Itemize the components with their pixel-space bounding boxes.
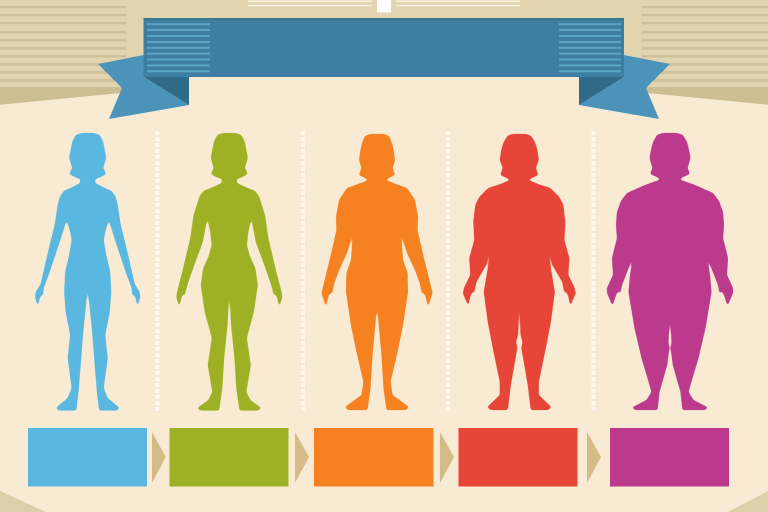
figure: purple severely obese body — [607, 133, 733, 410]
legend box: purple — [610, 428, 729, 486]
arrow 2 — [295, 432, 309, 483]
bottom right corner wedge — [728, 491, 768, 512]
banner ribbon — [98, 18, 670, 119]
figure: orange overweight body — [322, 134, 432, 410]
arrow 1 — [152, 432, 166, 483]
bottom left corner wedge — [0, 491, 46, 512]
dotted dividers — [157, 131, 594, 412]
figure: red obese body — [463, 134, 576, 410]
arrow 3 — [440, 432, 454, 483]
panel: top background band — [0, 0, 768, 105]
legend box: green — [170, 428, 288, 486]
legend box: red — [458, 428, 578, 486]
legend box: blue — [28, 428, 147, 486]
arrow 4 — [587, 432, 601, 483]
figure: green curvy body — [176, 133, 282, 410]
figure: blue slim body — [35, 133, 140, 410]
legend box: orange — [314, 428, 434, 486]
top centre lines and white square — [248, 0, 520, 12]
